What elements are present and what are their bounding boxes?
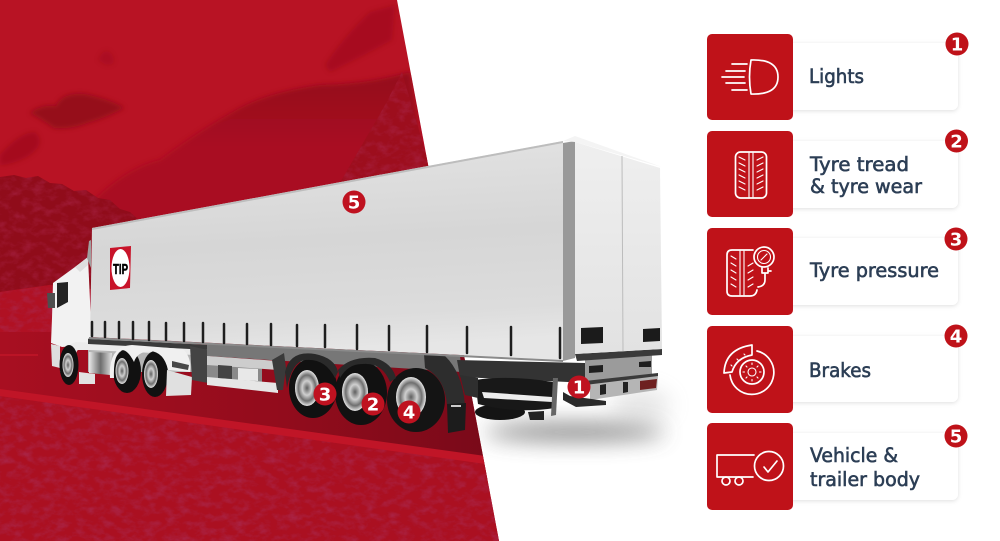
badge 4: 4 — [950, 326, 962, 348]
badge 3: 3 — [950, 230, 962, 250]
ground shadow — [485, 389, 670, 441]
grass foreground — [0, 396, 500, 541]
mudguard — [166, 370, 192, 396]
tractor wheels — [60, 345, 168, 397]
spare wheel — [460, 375, 558, 420]
heading: tyre pressure: Tyre pressure — [809, 259, 939, 282]
wheel arches — [110, 345, 190, 378]
badge 4 — [944, 324, 968, 348]
heading: lights: Lights — [809, 65, 864, 88]
heading: brakes: Brakes — [809, 359, 871, 382]
badge 1 — [946, 32, 968, 56]
label card — [780, 43, 958, 110]
left forest hill — [0, 175, 138, 292]
mountain ridge — [97, 70, 428, 219]
clouds — [0, 5, 395, 165]
curtain straps — [92, 322, 560, 358]
road edge stripe — [0, 389, 500, 466]
badge 5: 5 — [950, 426, 962, 448]
badge 1: 1 — [951, 34, 963, 56]
icon tile — [707, 131, 793, 217]
chassis under cab — [88, 338, 210, 372]
truck — [47, 136, 662, 433]
label card — [780, 238, 958, 305]
mudflap — [447, 403, 466, 433]
trailer rails — [207, 344, 462, 393]
rear doors — [575, 142, 662, 354]
rear post — [563, 141, 575, 361]
heading: vehicle and trailer body: trailer body — [810, 468, 920, 491]
wheel fenders — [285, 353, 465, 405]
truck marker 1 — [568, 376, 590, 398]
tow hook — [563, 392, 606, 407]
heading: vehicle and trailer body: Vehicle & — [810, 444, 898, 467]
icon tile — [707, 423, 793, 510]
cab body — [51, 257, 92, 347]
icon: trailer with check mark — [717, 452, 784, 485]
panel: vehicle and trailer body — [707, 423, 968, 510]
truck marker 3 — [314, 382, 336, 406]
label card — [780, 336, 958, 402]
truck marker 4 — [398, 400, 420, 424]
icon: tyre tread — [736, 152, 766, 198]
icon tile — [707, 34, 793, 120]
heading: tyre tread and wear: Tyre tread — [809, 153, 909, 176]
middle ground field — [0, 286, 91, 332]
panel: tyre pressure — [707, 228, 968, 315]
rear grey plate — [585, 355, 652, 383]
rear chassis — [457, 349, 662, 407]
red landscape background panel — [0, 0, 500, 541]
engine mechanics — [190, 346, 208, 383]
panel: tyre tread — [707, 130, 968, 217]
badge 2 — [945, 130, 968, 152]
badge 3 — [944, 228, 968, 250]
tractor unit — [47, 240, 215, 397]
badge 2: 2 — [950, 132, 963, 152]
roof edge — [563, 136, 662, 167]
truck marker 1: 1 — [573, 378, 585, 398]
icon tile — [707, 228, 793, 315]
icon tile — [707, 326, 793, 413]
truck marker 2: 2 — [367, 394, 379, 416]
bumper — [590, 375, 658, 400]
panel: lights — [707, 32, 968, 120]
TIP logo — [110, 246, 131, 290]
truck marker 4: 4 — [403, 402, 415, 424]
heading: tyre tread and wear: & tyre wear — [810, 175, 923, 198]
icon: tyre with pressure gauge — [727, 247, 774, 296]
right forest slope — [340, 72, 428, 182]
fuel tank — [89, 352, 112, 375]
icon: brake disc and caliper — [724, 345, 774, 394]
label card — [780, 141, 958, 208]
trailer curtain side — [90, 141, 563, 360]
badge 5 — [944, 424, 968, 448]
truck marker 3: 3 — [319, 384, 331, 406]
truck marker 2 — [362, 392, 384, 416]
rear floor strip — [575, 349, 662, 361]
road — [0, 332, 500, 482]
truck marker 5: 5 — [348, 192, 360, 214]
label card — [780, 433, 958, 500]
panel: brakes — [707, 324, 968, 413]
icon: headlight — [722, 60, 778, 94]
truck marker 5 — [342, 190, 366, 214]
trailer wheels — [289, 358, 445, 432]
TIP logo: TIP — [113, 261, 128, 278]
